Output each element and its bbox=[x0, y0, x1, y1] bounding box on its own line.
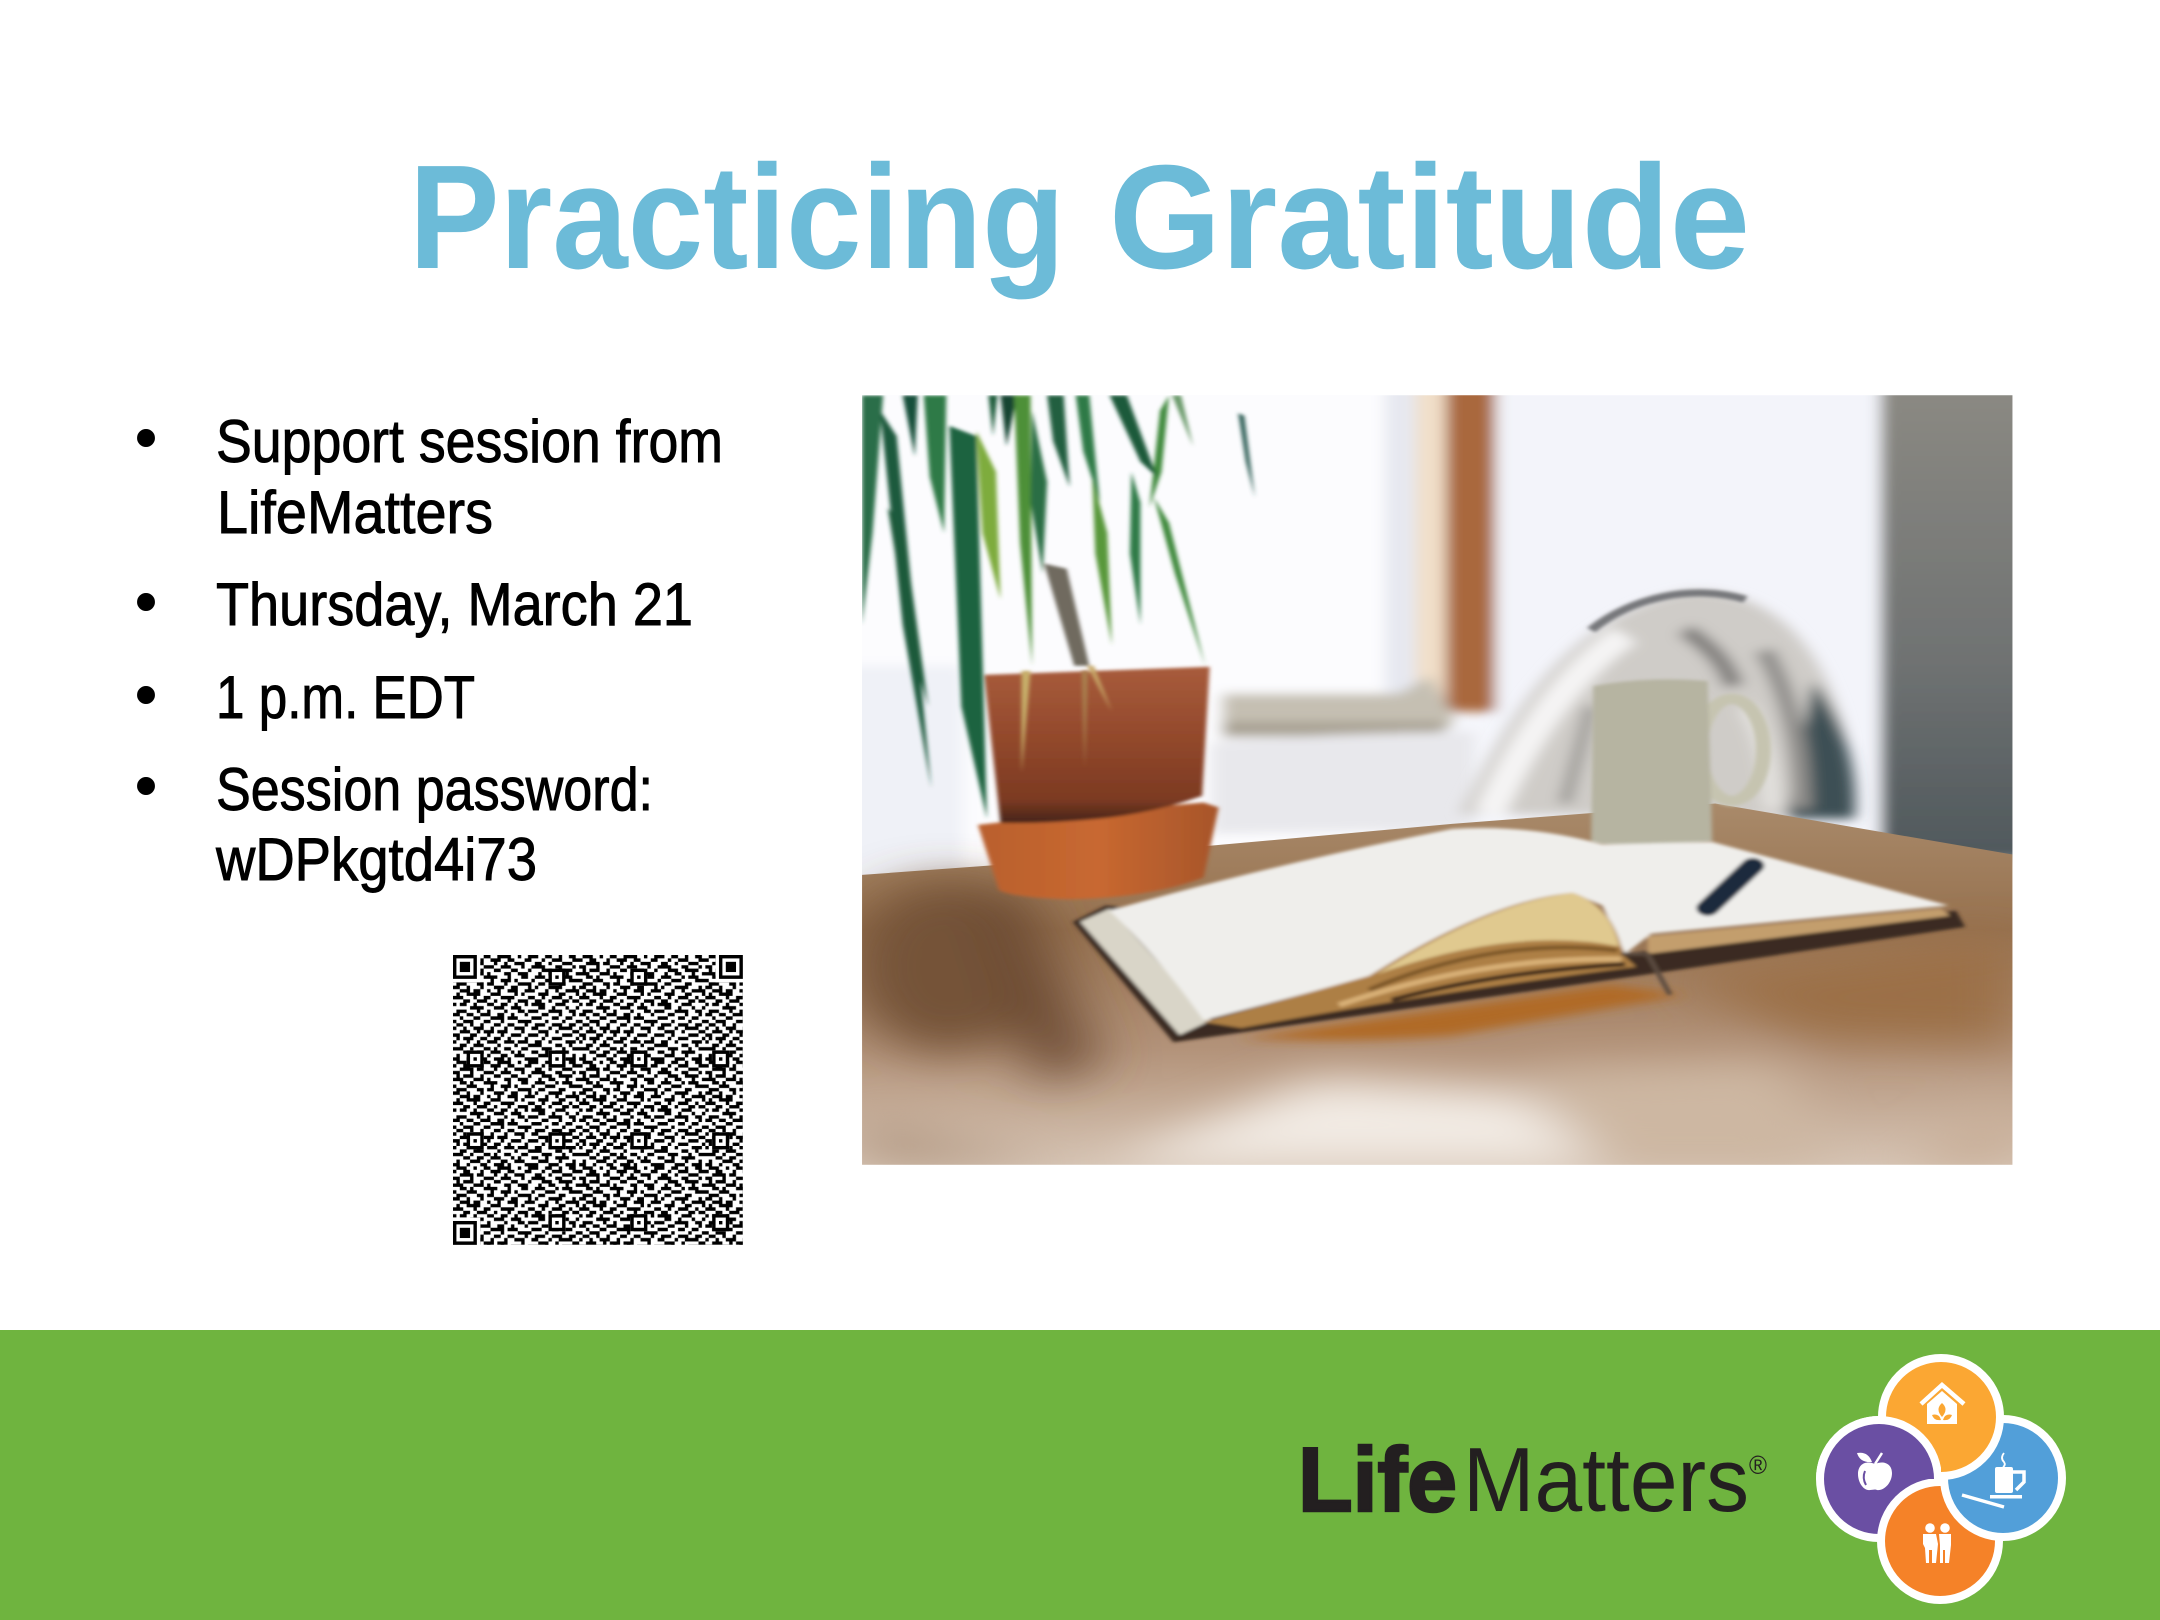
QR code bbox=[450, 952, 746, 1248]
icon: house with plant bbox=[1921, 1385, 1964, 1424]
book shadow on table bbox=[1241, 985, 1685, 1040]
wordmark: LifeMatters bbox=[1298, 1430, 1767, 1531]
bullet: session password: Session password: bbox=[216, 756, 653, 823]
logo: four interlocking circles bbox=[1820, 1358, 2062, 1600]
photo: notebook, mug and plant on a wooden table bbox=[835, 370, 2046, 1166]
icon: two people bbox=[1923, 1523, 1951, 1563]
table bbox=[862, 803, 2012, 1166]
plant pot and saucer bbox=[978, 667, 1219, 899]
icon: apple bbox=[1857, 1453, 1892, 1490]
wordmark: LifeMatters: Matters bbox=[1463, 1430, 1749, 1531]
bullet: session password bbox=[138, 756, 653, 893]
icon: mug and pencil bbox=[1962, 1453, 2024, 1507]
bullet: support session bbox=[138, 408, 723, 546]
bullet list bbox=[138, 408, 723, 893]
pen bbox=[1708, 866, 1753, 908]
title: Practicing bbox=[409, 135, 1065, 300]
window background and frame bbox=[1214, 395, 2012, 862]
title: Gratitude bbox=[1109, 135, 1750, 300]
plant leaves bbox=[862, 395, 1255, 819]
title bbox=[409, 135, 1750, 300]
footer band bbox=[0, 1330, 2160, 1620]
wordmark: LifeMatters: ® bbox=[1749, 1450, 1767, 1480]
bullet: session password: wDPkgtd4i73 bbox=[215, 826, 537, 893]
bullet: support session: LifeMatters bbox=[217, 479, 493, 546]
bullet: time: 1 p.m. EDT bbox=[216, 664, 475, 731]
notebook bbox=[1073, 828, 1965, 1042]
wordmark: LifeMatters: Life bbox=[1298, 1430, 1457, 1531]
chair back rail bbox=[1591, 593, 1745, 630]
bullet: time bbox=[138, 664, 475, 731]
bullet: support session: Support session from bbox=[216, 408, 723, 475]
bullet: date: Thursday, March 21 bbox=[216, 571, 693, 638]
chair and blanket bbox=[1459, 591, 1855, 819]
mug bbox=[1591, 679, 1763, 847]
